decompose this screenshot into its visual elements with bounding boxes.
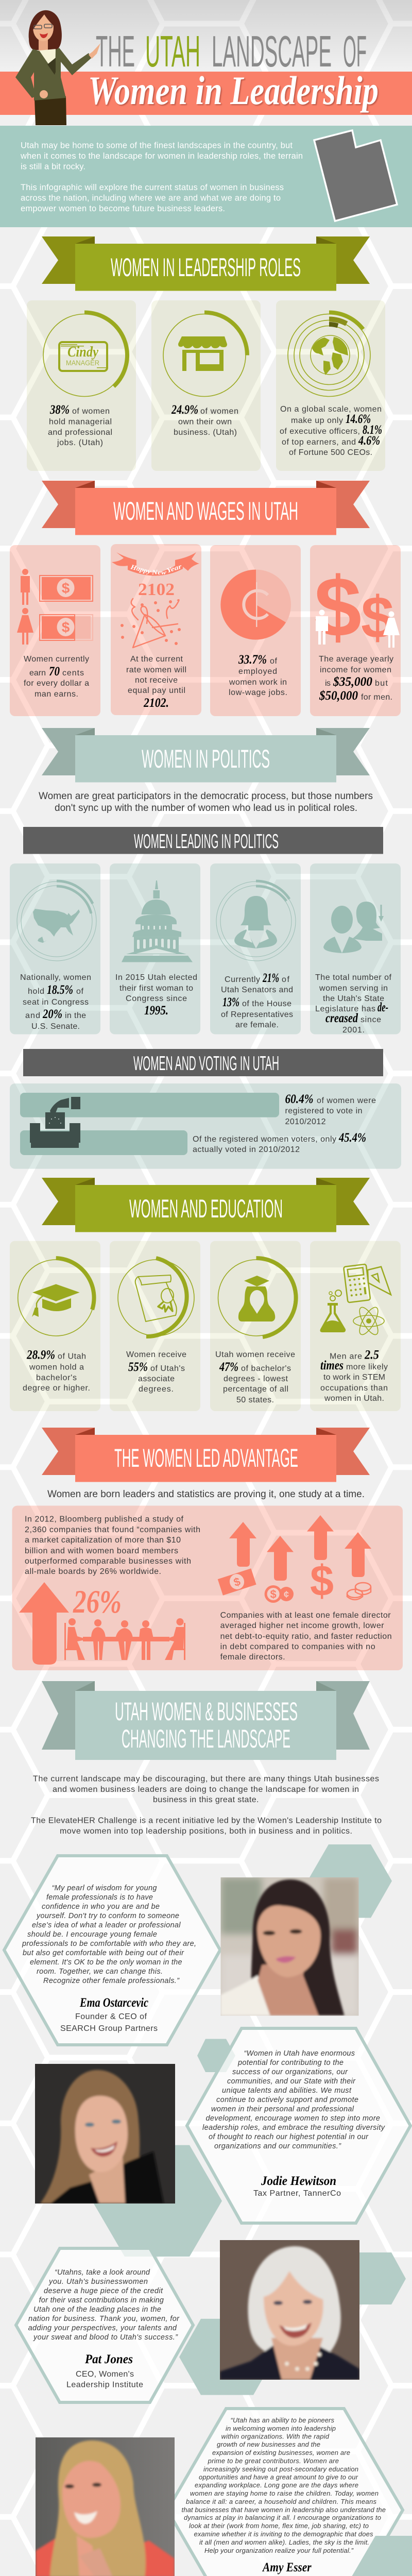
- quote hexagon: should be. I encourage young female: [27, 1930, 157, 1939]
- stat text: 13%: [222, 995, 239, 1009]
- quote hexagon: dynamics at play in balancing it all. I encourage organizations to: [184, 2514, 381, 2521]
- stat text: Women currently: [24, 655, 89, 664]
- stat text: cents: [62, 669, 84, 677]
- testimonial: Pat Jones: [16, 2240, 406, 2402]
- quote hexagon: communities, and our State with their: [227, 2077, 356, 2086]
- stat text: bachelor's: [36, 1374, 77, 1382]
- stat text: On a global scale, women: [280, 405, 382, 414]
- female directors text: in debt compared to companies with no: [220, 1642, 375, 1651]
- stat text: In 2015 Utah elected: [115, 973, 197, 982]
- quote hexagon: Leadership Institute: [66, 2381, 143, 2389]
- stat text: $50,000: [319, 689, 358, 703]
- quote hexagon: leadership roles, and embrace the resulting diversity: [202, 2124, 385, 2132]
- female directors text: female directors.: [220, 1653, 285, 1662]
- icon: Utah map: [314, 130, 397, 221]
- stat text: 20%: [42, 1007, 62, 1021]
- icon: pie chart with cent sign: [220, 570, 291, 640]
- stat text: Men are: [330, 1352, 362, 1361]
- quote hexagon: unique talents and abilities. We must: [222, 2087, 352, 2095]
- icon: ballot box: [30, 1097, 80, 1148]
- panel: State Legislature decrease: [310, 863, 401, 1035]
- stat text: rate women will: [126, 666, 186, 674]
- stat text: [115, 973, 197, 1018]
- icon: rising arrows with money: [218, 1515, 371, 1605]
- Bloomberg study text: a market capitalization of more than $10: [25, 1536, 181, 1545]
- stat text: for every dollar a: [24, 679, 89, 688]
- stat text: employed: [238, 667, 277, 676]
- quote hexagon: [16, 2248, 193, 2402]
- stat text: [320, 1348, 388, 1403]
- voting text: of women were: [317, 1096, 376, 1105]
- stat text: women serving in: [319, 984, 388, 993]
- stat text: 33.7%: [238, 653, 267, 667]
- stat text: [126, 655, 186, 710]
- stat text: man earns.: [35, 690, 78, 699]
- stat text: of women: [72, 407, 110, 416]
- stat text: [126, 1350, 186, 1394]
- ribbon: Women and Wages in Utah: [42, 481, 370, 535]
- panel: bachelor's degree: [10, 1241, 100, 1411]
- stat text: women work in: [229, 678, 287, 687]
- female directors text: Companies with at least one female director: [220, 1611, 391, 1620]
- icon: party ribbon, year and confetti: Year: [165, 562, 183, 574]
- stat text: de-: [377, 1001, 388, 1014]
- icon: name badge in progress ring: Cindy: [67, 344, 98, 360]
- quote hexagon: Founder & CEO of: [75, 2012, 147, 2021]
- title: The Utah Landscape of: [96, 27, 367, 76]
- stat text: 1995.: [144, 1004, 168, 1018]
- quote hexagon: [167, 2409, 403, 2576]
- panel: introduction: [0, 126, 412, 227]
- stat text: 50 states.: [236, 1396, 274, 1404]
- quote hexagon: development, encourage women to step into more: [206, 2114, 380, 2123]
- title: The Utah Landscape of: THE: [96, 27, 135, 76]
- stat text: of women: [200, 407, 238, 416]
- intro text: is still a bit rocky.: [21, 162, 85, 171]
- panel: 33.7% low-wage jobs: [210, 545, 301, 716]
- stat text: [215, 1350, 295, 1404]
- quote hexagon: examine whether it is inviting to the demographic that does: [194, 2530, 373, 2538]
- quote hexagon: growth of new businesses and the: [217, 2441, 320, 2448]
- stat text: own their own: [178, 417, 232, 427]
- quote hexagon: balance it all: a career, a household and children. This means: [186, 2498, 377, 2505]
- Bloomberg study text: 2,360 companies that found “companies with: [25, 1526, 200, 1534]
- quote hexagon: organizations and our communities.”: [214, 2142, 341, 2150]
- quote hexagon: deserve a huge piece of the credit: [44, 2287, 163, 2295]
- stat text: [280, 405, 382, 457]
- stat text: Legislature has: [315, 1005, 375, 1013]
- stat text: associate: [138, 1375, 175, 1383]
- photo: Amy Esser: [36, 2437, 175, 2576]
- quote hexagon: Ema Ostarcevic: [79, 1996, 148, 2010]
- quote hexagon: room. Together, we can change this.: [37, 1968, 163, 1976]
- stat text: not receive: [135, 676, 178, 685]
- stat text: 2102.: [143, 696, 169, 710]
- decorative hexagon: lower right: [343, 2536, 412, 2576]
- stat text: The average yearly: [319, 655, 393, 664]
- quote hexagon: opportunities and have a great amount to give to our: [199, 2473, 358, 2481]
- stat text: $35,000: [333, 675, 372, 689]
- quote hexagon: Recognize other female professionals.”: [43, 1977, 180, 1985]
- testimonial: Ema Ostarcevic: [4, 1844, 392, 2045]
- voting text: 60.4%: [285, 1092, 313, 1106]
- quote hexagon: confidence in who you are and be: [42, 1903, 160, 1911]
- quote hexagon: “Utah has an ability to be pioneers: [231, 2416, 335, 2424]
- photo: Pat Jones: [220, 2240, 359, 2380]
- quote hexagon: but also get comfortable with being out of their: [23, 1949, 184, 1957]
- Bloomberg study text: outperformed comparable businesses with: [25, 1557, 191, 1566]
- bar chart: registered voters 60.4%: [20, 1093, 279, 1117]
- stat text: of executive officers,: [280, 427, 360, 436]
- stat text: of Utah: [58, 1352, 86, 1361]
- Bloomberg study text: In 2012, Bloomberg published a study of: [25, 1515, 184, 1524]
- intro text: Utah may be home to some of the finest landscapes in the country, but: [21, 141, 293, 150]
- stat text: [23, 1348, 90, 1393]
- stat text: 2.5: [364, 1348, 379, 1362]
- icon: man and woman with dollar bills: [17, 569, 93, 645]
- stat text: for men.: [361, 693, 392, 702]
- stat: 26%: 26%: [73, 1583, 122, 1620]
- ribbon: Women in Politics: [42, 728, 370, 782]
- politics intro text: Women are great participators in the democratic process, but those numbers: [39, 791, 373, 802]
- icon: diploma in ring: [118, 1258, 194, 1336]
- stat text: creased: [325, 1011, 358, 1025]
- stat text: Nationally, women: [20, 973, 91, 982]
- voting text: actually voted in 2010/2012: [193, 1145, 300, 1154]
- stat text: jobs. (Utah): [57, 438, 103, 447]
- stat text: degrees - lowest: [224, 1375, 288, 1383]
- quote hexagon: “Utahns, take a look around: [55, 2268, 150, 2277]
- photo: Ema Ostarcevic: [220, 1877, 358, 2015]
- quote hexagon: expanding workplace. Long gone are the days where: [195, 2481, 358, 2489]
- icon: rising arrows with money: $: [310, 1556, 334, 1605]
- quote hexagon: women in their personal and professional: [211, 2105, 354, 2113]
- voting text: 45.4%: [338, 1131, 366, 1145]
- intro text: across the nation, including where we are and what we are doing to: [21, 194, 281, 203]
- quote hexagon: potential for contributing to the: [237, 2059, 344, 2067]
- stat text: 38%: [49, 403, 70, 417]
- icon: dollar signs with man and woman: [314, 560, 400, 654]
- icon: female graduate in ring: [218, 1258, 296, 1337]
- icon: board meeting: [64, 1618, 185, 1660]
- quote hexagon: CEO, Women's: [76, 2370, 134, 2379]
- voting text: 2010/2012: [285, 1117, 326, 1126]
- quote hexagon: success of our organizations, our: [232, 2068, 348, 2076]
- stat text: equal pay until: [128, 686, 185, 695]
- quote hexagon: expansion of existing businesses, women are: [212, 2449, 350, 2456]
- female directors text: averaged higher net income growth, lower: [220, 1621, 384, 1630]
- icon: man and woman with dollar bills: $: [62, 580, 70, 596]
- stat text: Utah Senators and: [221, 986, 293, 994]
- icon: large up arrow: [19, 1582, 69, 1665]
- stat text: of the House: [242, 999, 291, 1008]
- heading bar: Women and Voting in Utah: [23, 1049, 383, 1076]
- stat text: 8.1%: [363, 423, 382, 437]
- stat text: of: [282, 975, 290, 984]
- changing the landscape text: business in this great state.: [153, 1795, 259, 1804]
- stat text: income for women: [320, 666, 391, 674]
- panel: lowest bachelor's share: [210, 1241, 301, 1411]
- stat text: and professional: [48, 428, 112, 437]
- stat text: of Utah's: [150, 1364, 185, 1373]
- stat text: percentage of all: [223, 1385, 288, 1394]
- stat text: the Utah's State: [323, 994, 384, 1003]
- panel: equal pay 2102: [111, 544, 201, 715]
- quote hexagon: you. Utah's businesswomen: [48, 2278, 148, 2286]
- icon: party ribbon, year and confetti: 2102: [138, 580, 175, 599]
- quote hexagon: Utah one of the leading places in the: [33, 2306, 161, 2314]
- quote hexagon: Amy Esser: [262, 2561, 312, 2574]
- panel: voting statistics: [10, 1083, 401, 1169]
- quote hexagon: “My pearl of wisdom for young: [52, 1884, 157, 1892]
- stat text: [319, 655, 393, 703]
- changing the landscape text: move women into top leadership positions, both in business and in politics.: [60, 1827, 352, 1836]
- illustration: businesswoman pointing: [15, 10, 100, 125]
- panel: first woman to Congress: [110, 863, 200, 1035]
- icon: globe in three rings: [288, 312, 370, 397]
- ribbon: Women in Politics: WOMEN IN POLITICS: [142, 744, 270, 773]
- panel: global scale: [276, 300, 385, 471]
- stat text: 21%: [262, 971, 279, 985]
- quote hexagon: it all (men and women alike). Ladies, the sky is the limit.: [199, 2538, 369, 2546]
- stat text: low-wage jobs.: [229, 688, 287, 697]
- icon: man and woman with dollar bills: $: [62, 619, 70, 635]
- stat text: are female.: [235, 1021, 279, 1029]
- voting text: Of the registered women voters, only: [193, 1135, 336, 1144]
- panel: Utah Senators and House: [210, 863, 301, 1035]
- stat text: and: [25, 1011, 40, 1020]
- intro text: This infographic will explore the current status of women in business: [21, 183, 284, 192]
- icon: name badge in progress ring: MANAGER: [66, 359, 99, 367]
- stat text: to work in STEM: [323, 1373, 385, 1382]
- panel: 24.9% business owners: [151, 300, 261, 471]
- quote hexagon: Tax Partner, TannerCo: [253, 2189, 341, 2198]
- Bloomberg study text: all-male boards by 26% worldwide.: [25, 1567, 161, 1576]
- photo: Jodie Hewitson: [35, 2064, 175, 2204]
- quote hexagon: SEARCH Group Partners: [60, 2024, 158, 2033]
- Bloomberg study text: billion and with women board members: [25, 1547, 178, 1555]
- quote hexagon: Help your organization realize your full potential.”: [204, 2547, 354, 2554]
- quote hexagon: your sweat and blood to Utah's success.”: [33, 2333, 178, 2342]
- icon: businesswoman bust in rings: [216, 881, 296, 961]
- stat text: degree or higher.: [23, 1384, 90, 1393]
- stat text: Currently: [225, 975, 260, 984]
- icon: dollar signs with man and woman: $: [361, 585, 394, 651]
- stat text: The total number of: [315, 973, 392, 982]
- icon: rising arrows with money: ¢: [284, 1589, 289, 1600]
- ribbon: Utah Women and Businesses Changing the Landscape: [42, 1681, 370, 1760]
- stat text: earn: [29, 669, 46, 677]
- intro text: [20, 141, 303, 213]
- icon: capitol building: [122, 880, 193, 962]
- stat text: but: [375, 679, 388, 688]
- icon: calculator, ruler, flask, atom: [320, 1264, 391, 1337]
- icon: US map in rings: [17, 881, 96, 961]
- quote hexagon: nation for business. Thank you, women, for: [28, 2315, 180, 2323]
- stat text: 55%: [128, 1360, 148, 1374]
- panel: 38% managerial: [27, 300, 136, 471]
- stat text: 18.5%: [47, 983, 73, 997]
- stat text: [229, 653, 287, 697]
- quote hexagon: women are staying home to raise the children. Today, women: [190, 2489, 379, 2497]
- panel: 70 cents: [10, 545, 100, 716]
- quote hexagon: prime to be great contributors. Women are: [208, 2457, 339, 2465]
- stat text: of bachelor's: [241, 1364, 291, 1373]
- quote hexagon: within organizations. With the rapid: [221, 2433, 330, 2441]
- stat text: since: [360, 1015, 381, 1024]
- stat text: At the current: [130, 655, 183, 664]
- politics intro text: [39, 791, 373, 814]
- stat text: Utah women receive: [215, 1350, 295, 1359]
- stat text: 47%: [219, 1360, 238, 1374]
- changing the landscape text: The current landscape may be discouraging, but there are many things Utah businesses: [33, 1774, 379, 1784]
- stat text: 2001.: [342, 1026, 365, 1035]
- testimonial: Jodie Hewitson: [35, 2028, 410, 2257]
- infographic page: OF: [343, 27, 367, 76]
- panel: Congress seats: [10, 863, 100, 1035]
- stat text: 28.9%: [26, 1348, 55, 1362]
- panel: associate degrees: [110, 1241, 200, 1411]
- stat text: 14.6%: [346, 412, 371, 426]
- quote hexagon: element. It's OK to be the only woman in the: [30, 1958, 182, 1967]
- stat text: [24, 655, 89, 699]
- quote hexagon: else's idea of what a leader or professional: [32, 1921, 181, 1929]
- stat text: of Fortune 500 CEOs.: [289, 448, 372, 457]
- ribbon: Women in Leadership Roles: [42, 236, 370, 291]
- stat text: women hold a: [29, 1363, 84, 1372]
- icon: name badge in progress ring: [43, 312, 127, 397]
- advantage intro text: Women are born leaders and statistics are proving it, one study at a time.: [47, 1489, 365, 1500]
- icon: party ribbon, year and confetti: Happy: [129, 563, 152, 575]
- stat text: Women receive: [126, 1350, 186, 1359]
- panel: women led advantage: [12, 1505, 403, 1670]
- heading bar: Women Leading in Politics: [23, 827, 383, 854]
- stat text: U.S. Senate.: [31, 1022, 80, 1031]
- quote hexagon: look at their (work from home, flex time, job sharing, etc) to: [189, 2522, 369, 2530]
- icon: party ribbon, year and confetti: New: [151, 568, 166, 576]
- icon: party ribbon, year and confetti: [112, 552, 199, 648]
- quote hexagon: in welcoming women into leadership: [226, 2425, 336, 2432]
- quote hexagon: [187, 2028, 410, 2223]
- stat text: hold managerial: [49, 417, 112, 427]
- testimonial: Amy Esser: [36, 2409, 412, 2576]
- stat text: of: [270, 657, 278, 666]
- icon: rising arrows with money: $: [232, 1575, 242, 1589]
- voting text: registered to vote in: [285, 1107, 363, 1115]
- quote hexagon: that businesses that have women in leadership also understand the: [181, 2506, 386, 2514]
- stat text: hold: [28, 987, 44, 996]
- stat text: occupations than: [320, 1384, 388, 1393]
- stat text: 4.6%: [358, 434, 380, 448]
- voting text: [193, 1092, 376, 1154]
- panel: STEM occupations: [310, 1241, 401, 1411]
- stat text: 70: [49, 665, 60, 679]
- stat text: in the: [65, 1011, 86, 1020]
- quote hexagon: adding your perspectives, your talents and: [28, 2324, 177, 2332]
- icon: man and woman busts with down arrow: [323, 902, 384, 953]
- quote hexagon: [4, 1856, 220, 2045]
- ribbon: Women and Education: [42, 1178, 370, 1232]
- ribbon: The Women Led Advantage: [42, 1428, 370, 1482]
- quote hexagon: professionals to be comfortable with who they are,: [22, 1940, 196, 1948]
- changing the landscape text: and women business leaders are doing to change the landscape for women in: [53, 1785, 359, 1794]
- quote hexagon: female professionals is to have: [46, 1893, 153, 1902]
- stat text: times: [320, 1359, 344, 1372]
- stat text: women in Utah.: [324, 1394, 384, 1403]
- stat text: of top earners, and: [282, 438, 356, 447]
- stat text: [48, 403, 112, 447]
- quote hexagon: “Women in Utah have enormous: [244, 2049, 355, 2058]
- stat text: make up only: [291, 416, 343, 425]
- female directors text: [220, 1611, 392, 1662]
- stat text: 24.9%: [171, 403, 198, 417]
- quote hexagon: Pat Jones: [84, 2352, 133, 2366]
- intro text: when it comes to the landscape for women in leadership roles, the terrain: [20, 151, 303, 161]
- quote hexagon: yourself. Don't try to conform to someone: [36, 1912, 179, 1920]
- stat text: more likely: [346, 1363, 388, 1371]
- stat text: is: [325, 679, 331, 688]
- changing the landscape text: The ElevateHER Challenge is a recent initiative led by the Women's Leadership Institute to: [31, 1817, 382, 1825]
- stat text: [171, 403, 238, 437]
- stat text: business. (Utah): [174, 428, 237, 437]
- stat text: of Representatives: [221, 1010, 293, 1019]
- icon: dollar signs with man and woman: $: [314, 560, 362, 654]
- stat text: seat in Congress: [23, 998, 89, 1007]
- stat text: [20, 973, 91, 1031]
- quote hexagon: continue to actively support and promote: [216, 2096, 358, 2104]
- stat text: their first woman to: [119, 984, 193, 993]
- icon: storefront in progress ring: [163, 312, 247, 397]
- stat text: of: [76, 987, 84, 996]
- Bloomberg study text: [25, 1515, 200, 1576]
- stat text: [221, 971, 293, 1029]
- title: The Utah Landscape of: UTAH: [145, 27, 200, 76]
- stat text: [315, 973, 392, 1035]
- female directors text: net debt-to-equity ratio, and faster reduction: [220, 1632, 392, 1641]
- quote hexagon: for their vast contributions in making: [39, 2296, 164, 2304]
- bar chart: actually voted 45.4%: [20, 1130, 187, 1155]
- changing the landscape text: [31, 1774, 382, 1836]
- icon: rising arrows with money: $: [270, 1588, 277, 1601]
- panel: income gap: [310, 545, 401, 716]
- quote hexagon: of thought to reach our highest potential in our: [209, 2133, 369, 2141]
- icon: graduation cap in ring: [18, 1258, 94, 1336]
- quote hexagon: increasingly seeking out post-secondary education: [203, 2465, 358, 2473]
- stat text: Congress since: [126, 994, 187, 1003]
- politics intro text: don't sync up with the number of women who lead us in political roles.: [55, 803, 357, 814]
- intro text: empower women to become future business leaders.: [21, 204, 225, 213]
- stat text: degrees.: [139, 1385, 174, 1394]
- quote hexagon: Jodie Hewitson: [261, 2174, 336, 2188]
